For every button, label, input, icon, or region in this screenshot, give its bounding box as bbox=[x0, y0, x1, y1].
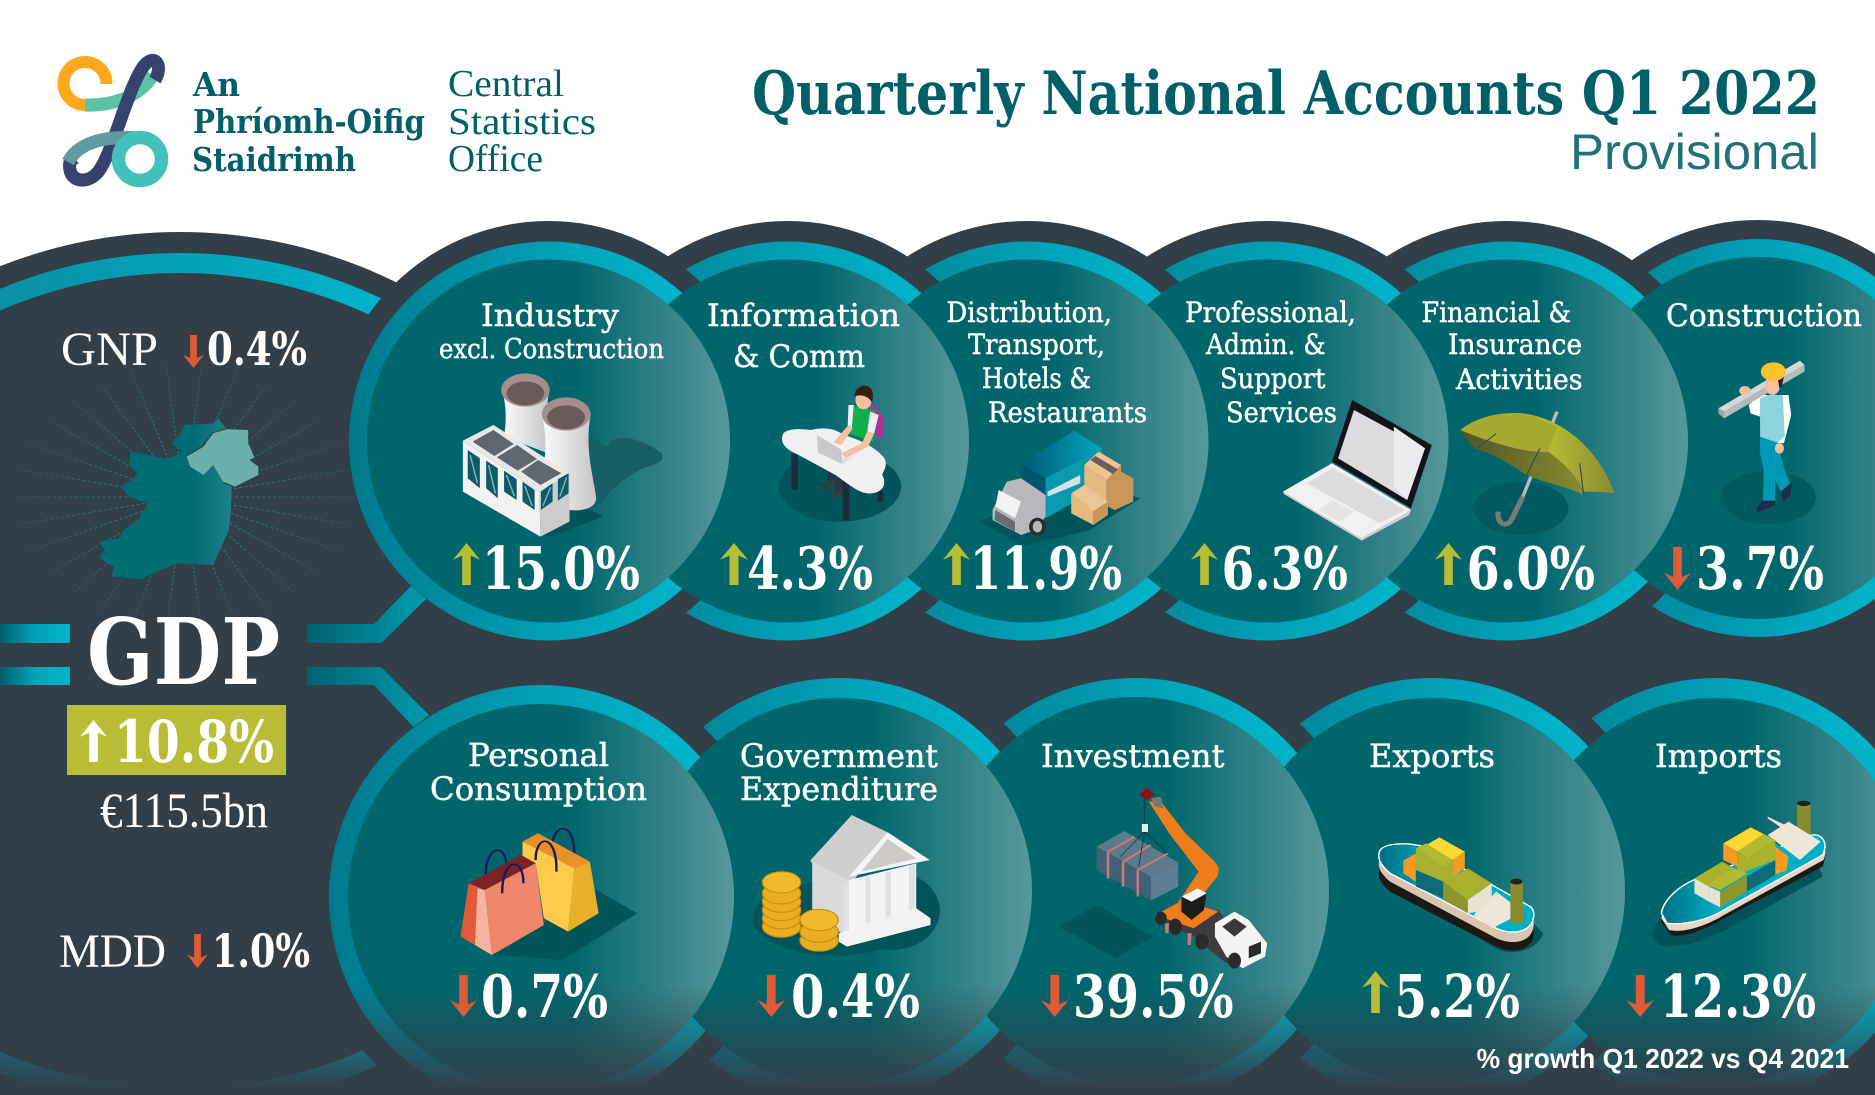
value: down 3.7% bbox=[1664, 534, 1824, 603]
icon: construction worker bbox=[1718, 361, 1816, 524]
panel: Construction bbox=[1577, 257, 1875, 619]
heading: Financial & Insurance Activities bbox=[1422, 296, 1582, 396]
left headline circle bbox=[0, 232, 650, 1095]
heading: Financial & Insurance Activities: Activities bbox=[1455, 363, 1582, 396]
GDP connector bars bbox=[0, 586, 429, 727]
icon: laptop bbox=[1283, 400, 1432, 541]
heading: Government Expenditure bbox=[740, 737, 938, 808]
value: down 39.5% bbox=[1041, 962, 1234, 1031]
logo wordmark: English: Central bbox=[448, 63, 564, 105]
map rays bbox=[12, 364, 356, 630]
logo wordmark: English: Statistics bbox=[448, 101, 596, 143]
logo wordmark: Irish: Staidrimh bbox=[192, 140, 356, 179]
footnote: % growth Q1 2022 vs Q4 2021 bbox=[1477, 1043, 1849, 1074]
heading: Financial & Insurance Activities: Insurance bbox=[1448, 328, 1582, 361]
panel: Government Expenditure bbox=[646, 698, 1032, 1084]
icon: person at cloud desk bbox=[779, 386, 901, 522]
GDP growth box: 10.8% bbox=[114, 708, 274, 776]
heading: Professional, Admin. & Support Services bbox=[1185, 296, 1356, 429]
icon: delivery truck and boxes bbox=[979, 431, 1141, 546]
top row rings bbox=[328, 220, 1875, 661]
heading: Exports: Exports bbox=[1369, 737, 1495, 775]
icon: factory with cooling towers bbox=[463, 373, 662, 537]
panel: Distribution, Transport, Hotels & Restaurants bbox=[846, 260, 1208, 622]
heading: Personal Consumption: Personal bbox=[468, 736, 609, 774]
heading: Government Expenditure: Expenditure bbox=[740, 770, 938, 808]
value: down 39.5%: 39.5% bbox=[1073, 962, 1234, 1031]
value: down 0.4% bbox=[758, 962, 920, 1031]
heading: Distribution, Transport, Hotels & Restaurants: Restaurants bbox=[988, 396, 1147, 429]
heading: Distribution, Transport, Hotels & Restaurants: Transport, bbox=[968, 328, 1105, 361]
subtitle: Provisional bbox=[1570, 124, 1819, 180]
GNP stat bbox=[61, 322, 307, 376]
panel: Financial & Insurance Activities bbox=[1325, 260, 1688, 622]
icon: shopping bags bbox=[460, 829, 637, 960]
heading: Government Expenditure: Government bbox=[740, 737, 938, 775]
heading: Distribution, Transport, Hotels & Restaurants: Hotels & bbox=[982, 362, 1091, 395]
icon: umbrella bbox=[1460, 412, 1615, 535]
heading: Information & Comm bbox=[707, 298, 900, 375]
MDD stat: MDD bbox=[59, 925, 166, 978]
value: down 0.7% bbox=[450, 962, 608, 1031]
logo wordmark: Irish: Phríomh-Oifig bbox=[193, 102, 425, 141]
value: up 5.2% bbox=[1362, 962, 1520, 1031]
value: up 15.0%: 15.0% bbox=[482, 534, 640, 603]
MDD stat: 1.0% bbox=[212, 924, 310, 978]
panel: Personal Consumption bbox=[348, 704, 734, 1090]
heading: Professional, Admin. & Support Services: Services bbox=[1226, 396, 1337, 429]
bottom row rings bbox=[306, 656, 1875, 1095]
panel: Investment bbox=[941, 697, 1329, 1085]
value: down 12.3%: 12.3% bbox=[1660, 962, 1816, 1031]
heading: Industry excl. Construction: Industry bbox=[481, 298, 620, 334]
GNP stat: 0.4% bbox=[207, 322, 307, 376]
heading: Personal Consumption bbox=[430, 736, 647, 808]
heading: Professional, Admin. & Support Services: Support bbox=[1220, 362, 1326, 395]
icon: bank and coins bbox=[752, 815, 940, 956]
panel: Information & Comm bbox=[606, 260, 969, 622]
panel: Industry excl. Construction bbox=[367, 260, 730, 622]
value: up 15.0% bbox=[453, 534, 640, 603]
map of Ireland bbox=[99, 418, 258, 579]
value: down 12.3% bbox=[1626, 962, 1816, 1031]
value: up 4.3% bbox=[720, 534, 873, 603]
icon: import container ship bbox=[1652, 801, 1825, 946]
value: up 6.3% bbox=[1191, 534, 1348, 603]
value: down 0.4%: 0.4% bbox=[791, 962, 920, 1031]
logo wordmark: English bbox=[448, 63, 596, 180]
heading: Investment: Investment bbox=[1041, 737, 1225, 775]
value: up 11.9%: 11.9% bbox=[970, 534, 1122, 603]
value: up 6.0% bbox=[1435, 534, 1595, 603]
value: down 0.7%: 0.7% bbox=[481, 962, 608, 1031]
logo wordmark: Irish: An bbox=[192, 65, 240, 104]
value: up 4.3%: 4.3% bbox=[747, 534, 873, 603]
heading: Information & Comm: & Comm bbox=[733, 339, 865, 375]
value: up 6.3%: 6.3% bbox=[1222, 534, 1348, 603]
heading: Industry excl. Construction: excl. Construction bbox=[439, 334, 664, 365]
icon: crane truck and container bbox=[1059, 787, 1267, 969]
value: up 11.9% bbox=[943, 534, 1122, 603]
panel: Exports bbox=[1239, 698, 1625, 1084]
heading: Industry excl. Construction bbox=[439, 298, 664, 365]
heading: Construction: Construction bbox=[1666, 298, 1862, 334]
heading: Professional, Admin. & Support Services: Admin. & bbox=[1205, 328, 1326, 361]
heading: Information & Comm: Information bbox=[707, 298, 900, 334]
heading: Distribution, Transport, Hotels & Restaurants: Distribution, bbox=[946, 296, 1112, 329]
heading: Professional, Admin. & Support Services: Professional, bbox=[1185, 296, 1356, 329]
heading: Imports: Imports bbox=[1655, 737, 1782, 775]
heading: Financial & Insurance Activities: Financial & bbox=[1422, 296, 1571, 329]
value: down 3.7%: 3.7% bbox=[1696, 534, 1824, 603]
heading: Personal Consumption: Consumption bbox=[430, 770, 647, 808]
GDP value: €115.5bn bbox=[100, 782, 268, 838]
GNP stat: GNP bbox=[61, 323, 158, 376]
GDP growth box bbox=[67, 705, 286, 776]
value: up 5.2%: 5.2% bbox=[1394, 962, 1520, 1031]
heading: Distribution, Transport, Hotels & Restaurants bbox=[946, 296, 1147, 429]
dark background bbox=[0, 441, 1875, 1095]
GDP heading: GDP bbox=[87, 598, 280, 706]
logo mark bbox=[64, 60, 161, 180]
logo wordmark: Irish bbox=[192, 65, 425, 179]
value: up 6.0%: 6.0% bbox=[1466, 534, 1595, 603]
panel: Professional, Admin. & Support Services bbox=[1086, 260, 1448, 622]
logo wordmark: English: Office bbox=[448, 138, 543, 180]
panel: Imports bbox=[1523, 698, 1875, 1084]
icon: export container ship bbox=[1379, 837, 1543, 952]
MDD stat bbox=[59, 924, 310, 978]
